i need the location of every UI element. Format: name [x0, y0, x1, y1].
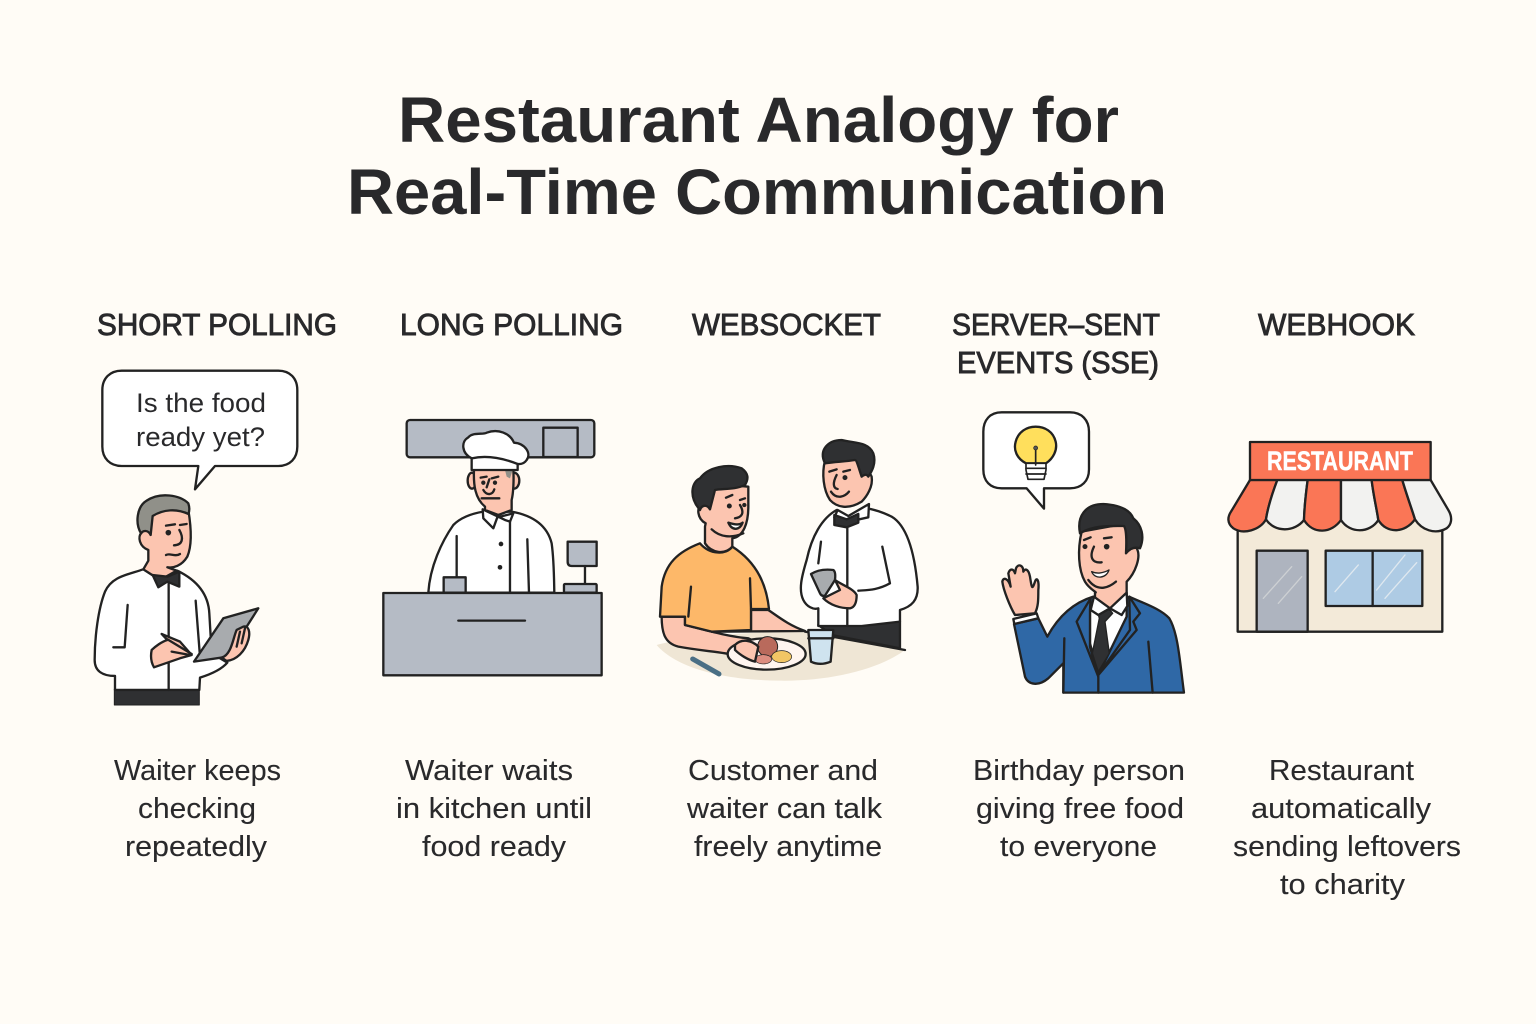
chef body [428, 512, 554, 593]
sign text: RESTAURANT [1267, 446, 1413, 476]
caption: long polling: Waiter waits [405, 755, 573, 787]
hands [151, 634, 192, 667]
phone [811, 570, 835, 596]
caption: long polling [396, 755, 592, 863]
shirt and tie [1090, 597, 1127, 675]
heading: long polling: LONG POLLING [400, 307, 623, 342]
panel: short polling [95, 307, 337, 863]
waiter trousers [818, 622, 900, 648]
customer head [698, 483, 748, 552]
chef ears [468, 473, 519, 489]
shirt [95, 569, 227, 690]
awning [1228, 480, 1451, 531]
title: Restaurant Analogy for [398, 84, 1119, 156]
caption: websocket: Customer and [688, 755, 878, 787]
monitor [564, 542, 597, 593]
waiter shirt [801, 508, 918, 626]
suit jacket [1014, 597, 1184, 693]
caption: webhook: to charity [1280, 869, 1406, 901]
head [1079, 523, 1138, 610]
speech bubble [102, 371, 297, 489]
caption: server-sent events: giving free food [976, 793, 1184, 825]
waiter head [823, 457, 872, 507]
caption: server-sent events: Birthday person [973, 755, 1185, 787]
illustration: customer and waiter at table [657, 440, 918, 681]
heading: server-sent events: SERVER–SENT [952, 307, 1160, 342]
knife [693, 659, 719, 674]
caption: long polling: food ready [422, 831, 567, 863]
panel: long polling [383, 307, 623, 863]
waving hand [1002, 565, 1039, 615]
caption: websocket [686, 755, 883, 863]
plate of food [728, 637, 806, 670]
cup on counter [444, 577, 466, 593]
illustration: man in suit waving with idea bubble [983, 412, 1184, 693]
speech text [136, 388, 266, 452]
head [139, 510, 191, 580]
title: Real-Time Communication [347, 156, 1167, 228]
lapels [1077, 598, 1098, 677]
caption: webhook: automatically [1251, 793, 1432, 825]
caption: short polling [114, 755, 281, 863]
speech text: ready yet? [136, 422, 265, 452]
caption: websocket: freely anytime [694, 831, 882, 863]
illustration: restaurant storefront [1228, 442, 1451, 632]
heading: websocket: WEBSOCKET [692, 307, 881, 342]
caption: websocket: waiter can talk [686, 793, 883, 825]
heading: short polling: SHORT POLLING [97, 307, 337, 342]
glass [808, 630, 833, 664]
idea bubble [983, 412, 1089, 509]
panel: websocket [657, 307, 918, 863]
chef head [474, 469, 514, 515]
tablet [194, 608, 258, 662]
bow tie [834, 514, 858, 527]
customer t-shirt [660, 543, 769, 632]
caption: server-sent events [973, 755, 1185, 863]
customer arm [662, 617, 758, 662]
speech text: Is the food [136, 388, 266, 418]
title [347, 84, 1167, 228]
caption: short polling: checking [138, 793, 256, 825]
caption: short polling: repeatedly [125, 831, 268, 863]
customer hand [735, 641, 758, 662]
illustration: waiter with tablet and speech bubble [95, 371, 297, 705]
caption: server-sent events: to everyone [1000, 831, 1157, 863]
counter [383, 593, 602, 675]
panel: server-sent events [952, 307, 1185, 863]
door [1257, 551, 1308, 632]
window [1326, 551, 1422, 606]
caption: short polling: Waiter keeps [114, 755, 281, 787]
sign [1250, 442, 1431, 480]
light bulb [1015, 427, 1056, 479]
illustration: chef at kitchen counter [383, 420, 602, 675]
table [657, 632, 905, 681]
chef collar [483, 509, 513, 528]
heading: server-sent events [952, 307, 1160, 380]
heading: server-sent events: EVENTS (SSE) [957, 345, 1159, 380]
bow tie [153, 572, 179, 587]
caption: long polling: in kitchen until [396, 793, 592, 825]
waiter hand [823, 580, 857, 608]
wall [1238, 520, 1442, 632]
caption: webhook [1233, 755, 1461, 901]
heading: webhook: WEBHOOK [1258, 307, 1415, 342]
trousers [114, 689, 199, 705]
chef hat [463, 431, 528, 470]
caption: webhook: Restaurant [1269, 755, 1414, 787]
caption: webhook: sending leftovers [1233, 831, 1461, 863]
kitchen hood [407, 420, 594, 457]
panel: webhook [1228, 307, 1461, 901]
